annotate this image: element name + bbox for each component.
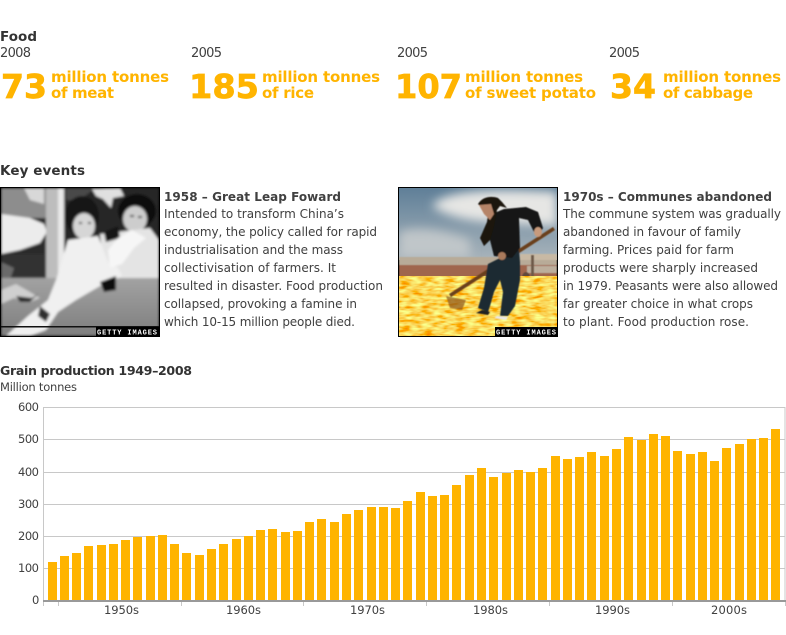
y axis labels: 300 — [18, 497, 39, 511]
text block: 1970s Communes abandoned: The commune system was gradually — [562, 207, 781, 221]
y axis labels: 500 — [18, 432, 39, 446]
stat: rice 2005: 2005 — [191, 46, 222, 61]
text block: 1970s Communes abandoned: far greater choice in what crops — [563, 297, 753, 311]
stat: meat 2008: 73 — [1, 67, 47, 106]
text block: 1970s Communes abandoned — [562, 190, 781, 329]
photo: Great Leap Forward, black and white crowd: GETTY IMAGES — [97, 330, 157, 338]
chart heading — [0, 363, 192, 394]
stat: rice 2005: of rice — [262, 84, 314, 102]
y axis labels: 400 — [18, 465, 39, 479]
text block: 1970s Communes abandoned: abandoned in favour of family — [563, 225, 741, 239]
text block: 1958 Great Leap Forward: which 10-15 million people died. — [164, 315, 355, 329]
stat: meat 2008: 2008 — [0, 46, 31, 61]
stat: meat 2008 — [0, 46, 169, 106]
x axis decade labels: 1970s — [350, 603, 385, 617]
stat: rice 2005 — [189, 46, 380, 106]
text block: 1970s Communes abandoned: 1970s – Communes abandoned — [563, 190, 772, 204]
stat: meat 2008: of meat — [51, 84, 114, 102]
stat: rice 2005: million tonnes — [262, 68, 380, 86]
text block: 1958 Great Leap Forward: collectivisation of farmers. It — [164, 261, 336, 275]
y axis labels: 100 — [18, 561, 39, 575]
text block: 1958 Great Leap Forward: 1958 – Great Leap Foward — [164, 190, 341, 204]
y axis labels: 200 — [18, 529, 39, 543]
stat: cabbage 2005: 34 — [610, 67, 656, 106]
text block: 1958 Great Leap Forward: collapsed, provoking a famine in — [164, 297, 357, 311]
stat: sweet potato 2005 — [395, 46, 596, 106]
corn texture — [399, 276, 557, 337]
text block: 1958 Great Leap Forward: industrialisation and the mass — [164, 243, 343, 257]
chart heading: Million tonnes — [0, 380, 77, 394]
x axis decade labels: 2000s — [711, 603, 747, 617]
x axis decade labels: 1950s — [104, 603, 139, 617]
text block: 1970s Communes abandoned: products were sharply increased — [563, 261, 758, 275]
x axis decade labels — [104, 603, 747, 617]
stat: cabbage 2005: million tonnes — [663, 68, 781, 86]
x axis decade labels: 1990s — [595, 603, 630, 617]
y axis labels — [18, 400, 39, 607]
text block: 1958 Great Leap Forward — [164, 190, 383, 329]
text block: 1970s Communes abandoned: in 1979. Peasants were also allowed — [563, 279, 778, 293]
photo: woman raking corn — [398, 187, 558, 338]
section heading: Key events: Key events — [0, 163, 85, 179]
stat: sweet potato 2005: 107 — [395, 67, 462, 106]
text block: 1970s Communes abandoned: farming. Prices paid for farm — [563, 243, 734, 257]
stat: sweet potato 2005: million tonnes — [465, 68, 583, 86]
y axis labels: 600 — [18, 400, 39, 414]
x axis decade labels: 1960s — [226, 603, 261, 617]
bar chart: grain production — [43, 408, 786, 606]
text block: 1958 Great Leap Forward: Intended to transform China’s — [164, 207, 344, 221]
photo: woman raking corn: GETTY IMAGES — [496, 330, 556, 338]
x axis decade labels: 1980s — [473, 603, 508, 617]
section heading: Food: Food — [0, 29, 37, 45]
stat: cabbage 2005: of cabbage — [663, 84, 753, 102]
stat: cabbage 2005 — [609, 46, 781, 106]
stat: sweet potato 2005: 2005 — [397, 46, 428, 61]
text block: 1958 Great Leap Forward: resulted in disaster. Food production — [164, 279, 383, 293]
stat: cabbage 2005: 2005 — [609, 46, 640, 61]
stat: sweet potato 2005: of sweet potato — [465, 84, 596, 102]
stat: rice 2005: 185 — [189, 67, 259, 106]
text block: 1958 Great Leap Forward: economy, the policy called for rapid — [164, 225, 377, 239]
text block: 1970s Communes abandoned: to plant. Food production rose. — [563, 315, 749, 329]
chart heading: Grain production 1949–2008 — [0, 363, 192, 378]
photo: Great Leap Forward, black and white crowd — [0, 187, 160, 338]
y axis labels: 0 — [32, 593, 39, 607]
stat: meat 2008: million tonnes — [51, 68, 169, 86]
